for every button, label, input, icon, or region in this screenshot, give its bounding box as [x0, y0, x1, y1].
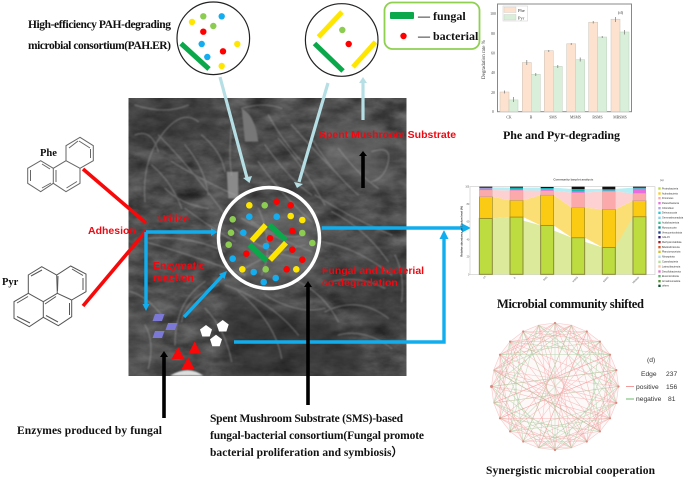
legend: network edges: 156 [666, 384, 677, 391]
legend: phylum list: Acidobacteriota [662, 222, 680, 225]
chart: community barplot: 100 [465, 187, 470, 189]
label: SMS-based consortium: fungal-bacterial consortium(Fungal promote [210, 430, 424, 442]
label: Microbial community shifted: Microbial community shifted [497, 297, 644, 311]
chart: community barplot [459, 177, 684, 288]
legend: Phe and Pyr swatches: Pyr [518, 16, 525, 20]
label: red process labels: Enzymatic [153, 260, 205, 272]
chart: community barplot: 60 [467, 222, 470, 224]
heading: PAH.ER consortium [28, 19, 171, 52]
label: red process labels [88, 129, 456, 289]
label: SMS-based consortium: bacterial proliferation and symbiosis） [210, 445, 403, 459]
label: enzymes produced by fungal: Enzymes produced by fungal [17, 425, 162, 437]
legend: Phe and Pyr swatches [503, 6, 528, 21]
chart: degradation bar chart: 80 [491, 32, 495, 36]
legend: phylum list: Verrucomicrobiota [662, 231, 683, 234]
legend: network edges: negative [636, 396, 662, 403]
legend: phylum list: others [662, 285, 670, 288]
heading: PAH.ER consortium: High-efficiency PAH-degrading [28, 19, 171, 31]
label: Phe: Phe [40, 148, 57, 159]
legend: network edges [626, 357, 677, 403]
label: SMS-based consortium: Spent Mushroom Substrate (SMS)-based [210, 413, 404, 425]
chart: community barplot: BSMS [603, 277, 610, 283]
chart: degradation bar chart: SMS [549, 116, 557, 120]
panel: SEM image background [128, 98, 407, 376]
legend: network edges: Edge [641, 371, 657, 378]
chart: degradation bar chart: 60 [491, 52, 495, 56]
legend: phylum list: Desulfobacterota [662, 270, 681, 273]
legend: phylum list: Patescibacteria [662, 202, 680, 205]
chart: community barplot: B [514, 277, 517, 280]
chart: degradation bar chart: CK [506, 116, 512, 120]
legend: network edges: (d) [647, 357, 655, 364]
label: red process labels: reaction [153, 272, 194, 284]
arrow: pale blue lines from magnified circles [220, 77, 367, 188]
icon: fungal-bacterial magnified circle [305, 4, 378, 76]
chart: community barplot: MSMS [573, 276, 579, 283]
label: Synergistic microbial cooperation: Synergistic microbial cooperation [486, 465, 656, 477]
label: red process labels: Utilize [158, 213, 189, 225]
legend: fungal and bacterial: — fungal [417, 9, 466, 23]
chart: community barplot: 40 [467, 239, 470, 241]
chart: degradation bar chart: (d) [618, 10, 624, 15]
legend: network edges: positive [636, 384, 659, 391]
chart: degradation bar chart: 40 [491, 71, 495, 75]
legend: phylum list: Elusimicrobiota [662, 275, 679, 278]
legend: phylum list: Latescibacterota [662, 265, 681, 268]
chart: degradation bar chart: MBSMS [613, 116, 627, 120]
chart: community barplot: 20 [467, 257, 470, 259]
icon: Pyr molecule [14, 266, 86, 327]
chart: community barplot: Relative abundance on Phylum level (%) [459, 206, 463, 257]
chart: community barplot: (a) [660, 178, 664, 182]
label: red process labels: Spent Mushroom Substrate [319, 129, 456, 141]
chart: degradation bar chart: B [530, 116, 533, 120]
legend: phylum list: Bdellovibrionota [662, 246, 680, 249]
legend: Phe and Pyr swatches: Phe [518, 8, 525, 13]
legend: phylum list: Nitrospirota [662, 256, 675, 259]
legend: network edges: 81 [668, 396, 676, 403]
legend: network edges: 237 [666, 371, 677, 378]
icon: Phe molecule [28, 137, 93, 192]
icon: PAH.ER magnified circle [177, 2, 250, 75]
chart: degradation bar chart: 20 [491, 91, 495, 95]
label: red process labels: co-degradation [322, 277, 398, 289]
legend: phylum list: Cyanobacteria [662, 261, 679, 264]
legend: phylum list: GAL15 [662, 236, 670, 239]
chart: degradation bar chart: BSMS [592, 116, 603, 120]
label: Pyr: Pyr [2, 277, 19, 288]
chart: community barplot: MBSMS [633, 277, 640, 284]
legend: phylum list: Firmicutes [662, 197, 674, 200]
label: SMS-based consortium [210, 413, 424, 459]
chart: degradation bar chart [482, 4, 632, 120]
label: red process labels: Adhesion [88, 225, 136, 237]
icon: white pentagons [200, 320, 229, 346]
chart: co-occurrence network [490, 322, 620, 451]
heading: PAH.ER consortium: microbial consortium(PAH.ER) [28, 40, 171, 52]
chart: community barplot: 0 [468, 274, 470, 276]
chart: community barplot: SMS [543, 276, 549, 282]
arrow: blue pathway arrows [142, 224, 471, 342]
arrow: red Phe and Pyr adhesion lines [83, 169, 146, 306]
legend: phylum list: Methylomirabilota [662, 241, 682, 244]
label: Phe and Pyr-degrading: Phe and Pyr-degrading [503, 128, 620, 142]
legend: fungal and bacterial: — bacterial [417, 29, 479, 43]
icon: large circle consortium [218, 188, 320, 288]
legend: phylum list: Proteobacteria [662, 187, 679, 190]
chart: community barplot: CK [483, 276, 487, 280]
legend: phylum list: Actinobacteria [662, 192, 678, 195]
chart: degradation bar chart: 0 [492, 110, 494, 114]
chart: degradation bar chart: MSMS [570, 116, 581, 120]
chart: community barplot: 80 [467, 204, 470, 206]
legend: phylum list: Gemmatimonadota [662, 217, 684, 220]
chart: degradation bar chart: Degradation rate % [482, 40, 487, 79]
chart: degradation bar chart: 100 [490, 12, 496, 16]
icon: red triangles [172, 342, 201, 369]
legend: phylum list: Myxococcota [662, 226, 677, 229]
legend: fungal and bacterial [384, 2, 480, 49]
label: red process labels: Fungal and bacterial [322, 265, 424, 277]
icon: purple enzymes [152, 314, 178, 338]
chart: community barplot: Community barplot analysis [553, 177, 594, 181]
legend: phylum list: Armatimonadota [662, 280, 681, 283]
legend: phylum list: Deinococcota [662, 212, 678, 215]
legend: phylum list [658, 187, 684, 288]
arrow: black pointers [160, 151, 367, 418]
legend: phylum list: Chloroflexi [662, 207, 674, 210]
legend: phylum list: Planctomycetota [662, 251, 681, 254]
